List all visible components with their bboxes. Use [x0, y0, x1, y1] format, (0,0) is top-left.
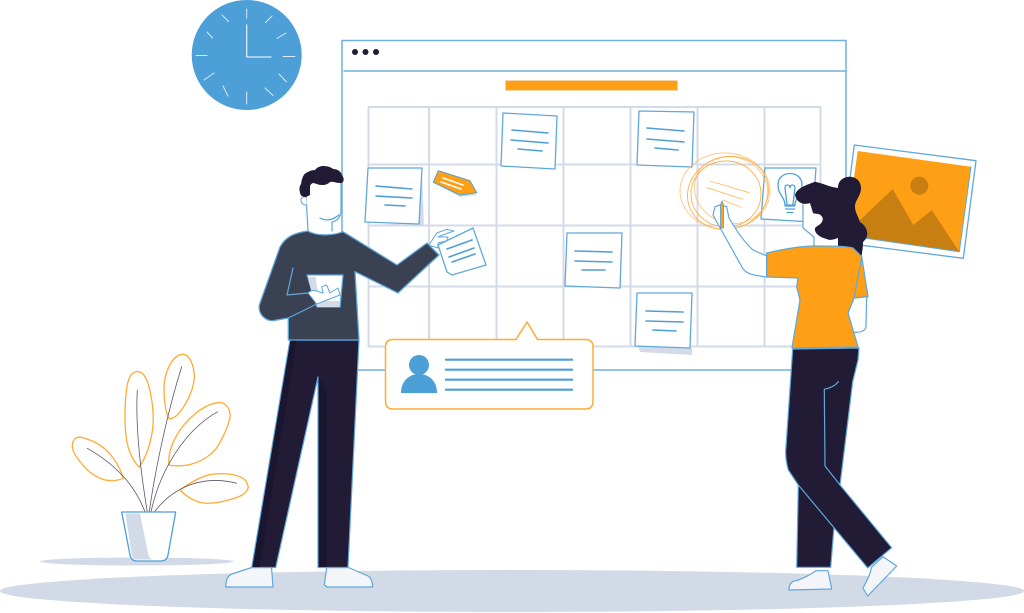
woman's face and neck [803, 200, 840, 247]
woman's hair [795, 177, 867, 256]
scribbled orange circle [678, 146, 778, 240]
woman's back arm [848, 296, 867, 332]
man's head and neck [306, 183, 341, 234]
calendar grid [368, 107, 820, 346]
sticky note 2 [501, 113, 557, 169]
pot [122, 512, 176, 561]
held tablet and hand [288, 275, 343, 318]
man's sweater [259, 231, 439, 340]
ground shadow [0, 570, 1024, 612]
man's hair [299, 166, 344, 197]
woman's shoes [789, 557, 897, 596]
picture frame with mountain image [842, 145, 976, 258]
stems [87, 367, 237, 512]
leaves [72, 354, 248, 503]
man presenting note [226, 166, 486, 587]
woman's orange shirt [767, 246, 868, 348]
panel: browser window calendar board [342, 40, 846, 370]
title bar placeholder [506, 80, 678, 90]
text placeholder lines [445, 360, 573, 390]
icon: light bulb note [761, 168, 816, 222]
man's trousers [252, 340, 359, 568]
man's shoes [226, 568, 373, 587]
window control dots [352, 49, 379, 55]
icon: wall clock [192, 0, 302, 110]
icon: user avatar [401, 355, 437, 393]
sticky note 1 [365, 168, 424, 226]
icon: orange tag note [433, 171, 477, 197]
held paper note and hand [429, 228, 486, 275]
sticky note 5 [635, 293, 692, 355]
sticky note 3 [637, 111, 694, 167]
callout: user profile card [386, 322, 593, 409]
woman's raised arm and hand [713, 205, 767, 277]
sticky note 4 [565, 233, 622, 288]
woman's rear trouser leg [797, 485, 840, 567]
woman drawing on the board [713, 177, 897, 596]
pencil [720, 201, 724, 228]
potted plant [40, 354, 248, 566]
plant floor shadow [40, 558, 234, 566]
woman's front trouser leg [786, 348, 892, 568]
